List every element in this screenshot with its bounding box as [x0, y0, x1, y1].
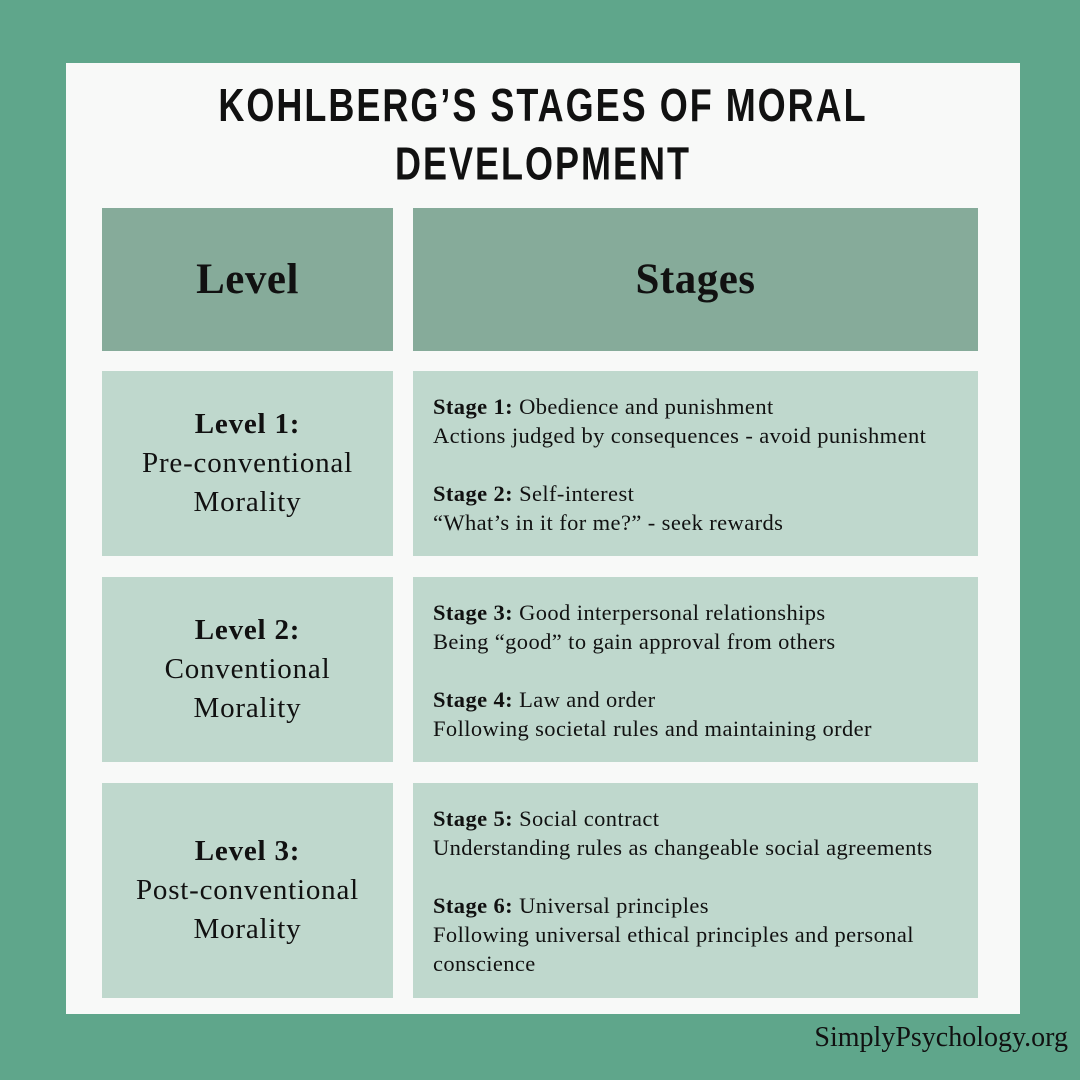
level 1 cell: [102, 371, 393, 556]
level 2 cell: Level 2:: [195, 614, 300, 646]
level 1 cell: Pre-conventional: [142, 447, 353, 479]
level 2 cell: [102, 577, 393, 762]
header: Level: [102, 208, 393, 351]
stages 3-4 cell: Stage 3: Good interpersonal relationships: [433, 600, 826, 625]
stages 5-6 cell: conscience: [433, 951, 536, 976]
level 2 cell: Conventional: [165, 653, 330, 685]
stages 5-6 cell: Stage 6: Universal principles: [433, 893, 709, 918]
stages 1-2 cell: Stage 2: Self-interest: [433, 481, 634, 506]
level 3 cell: [102, 783, 393, 998]
stages 3-4 cell: Being “good” to gain approval from others: [433, 629, 836, 654]
stages 3-4 cell: Following societal rules and maintaining order: [433, 716, 872, 741]
stages 1-2 cell: “What’s in it for me?” - seek rewards: [433, 510, 783, 535]
header: Stages: [413, 208, 978, 351]
header: Stages: Stages: [635, 256, 756, 303]
white panel: [66, 63, 1020, 1014]
stages 5-6 cell: Following universal ethical principles and personal: [433, 922, 914, 947]
footer credit: SimplyPsychology.org: [814, 1022, 1068, 1053]
header: Level: Level: [196, 256, 299, 303]
level 1 cell: Level 1:: [195, 408, 300, 440]
level 2 cell: Morality: [194, 692, 301, 724]
stages 1-2 cell: Actions judged by consequences - avoid punishment: [433, 423, 926, 448]
level 3 cell: Morality: [194, 913, 301, 945]
title: KOHLBERG’S STAGES OF MORAL: [218, 79, 868, 131]
title: [218, 79, 868, 190]
stages 1-2 cell: Stage 1: Obedience and punishment: [433, 394, 774, 419]
stages 5-6 cell: Stage 5: Social contract: [433, 806, 659, 831]
stages 3-4 cell: Stage 4: Law and order: [433, 687, 655, 712]
stages 5-6 cell: [413, 783, 978, 998]
level 3 cell: Post-conventional: [136, 874, 359, 906]
stages 3-4 cell: [413, 577, 978, 762]
stages 5-6 cell: Understanding rules as changeable social agreements: [433, 835, 933, 860]
title: DEVELOPMENT: [395, 137, 691, 190]
level 1 cell: Morality: [194, 486, 301, 518]
stages 1-2 cell: [413, 371, 978, 556]
level 3 cell: Level 3:: [195, 835, 300, 867]
